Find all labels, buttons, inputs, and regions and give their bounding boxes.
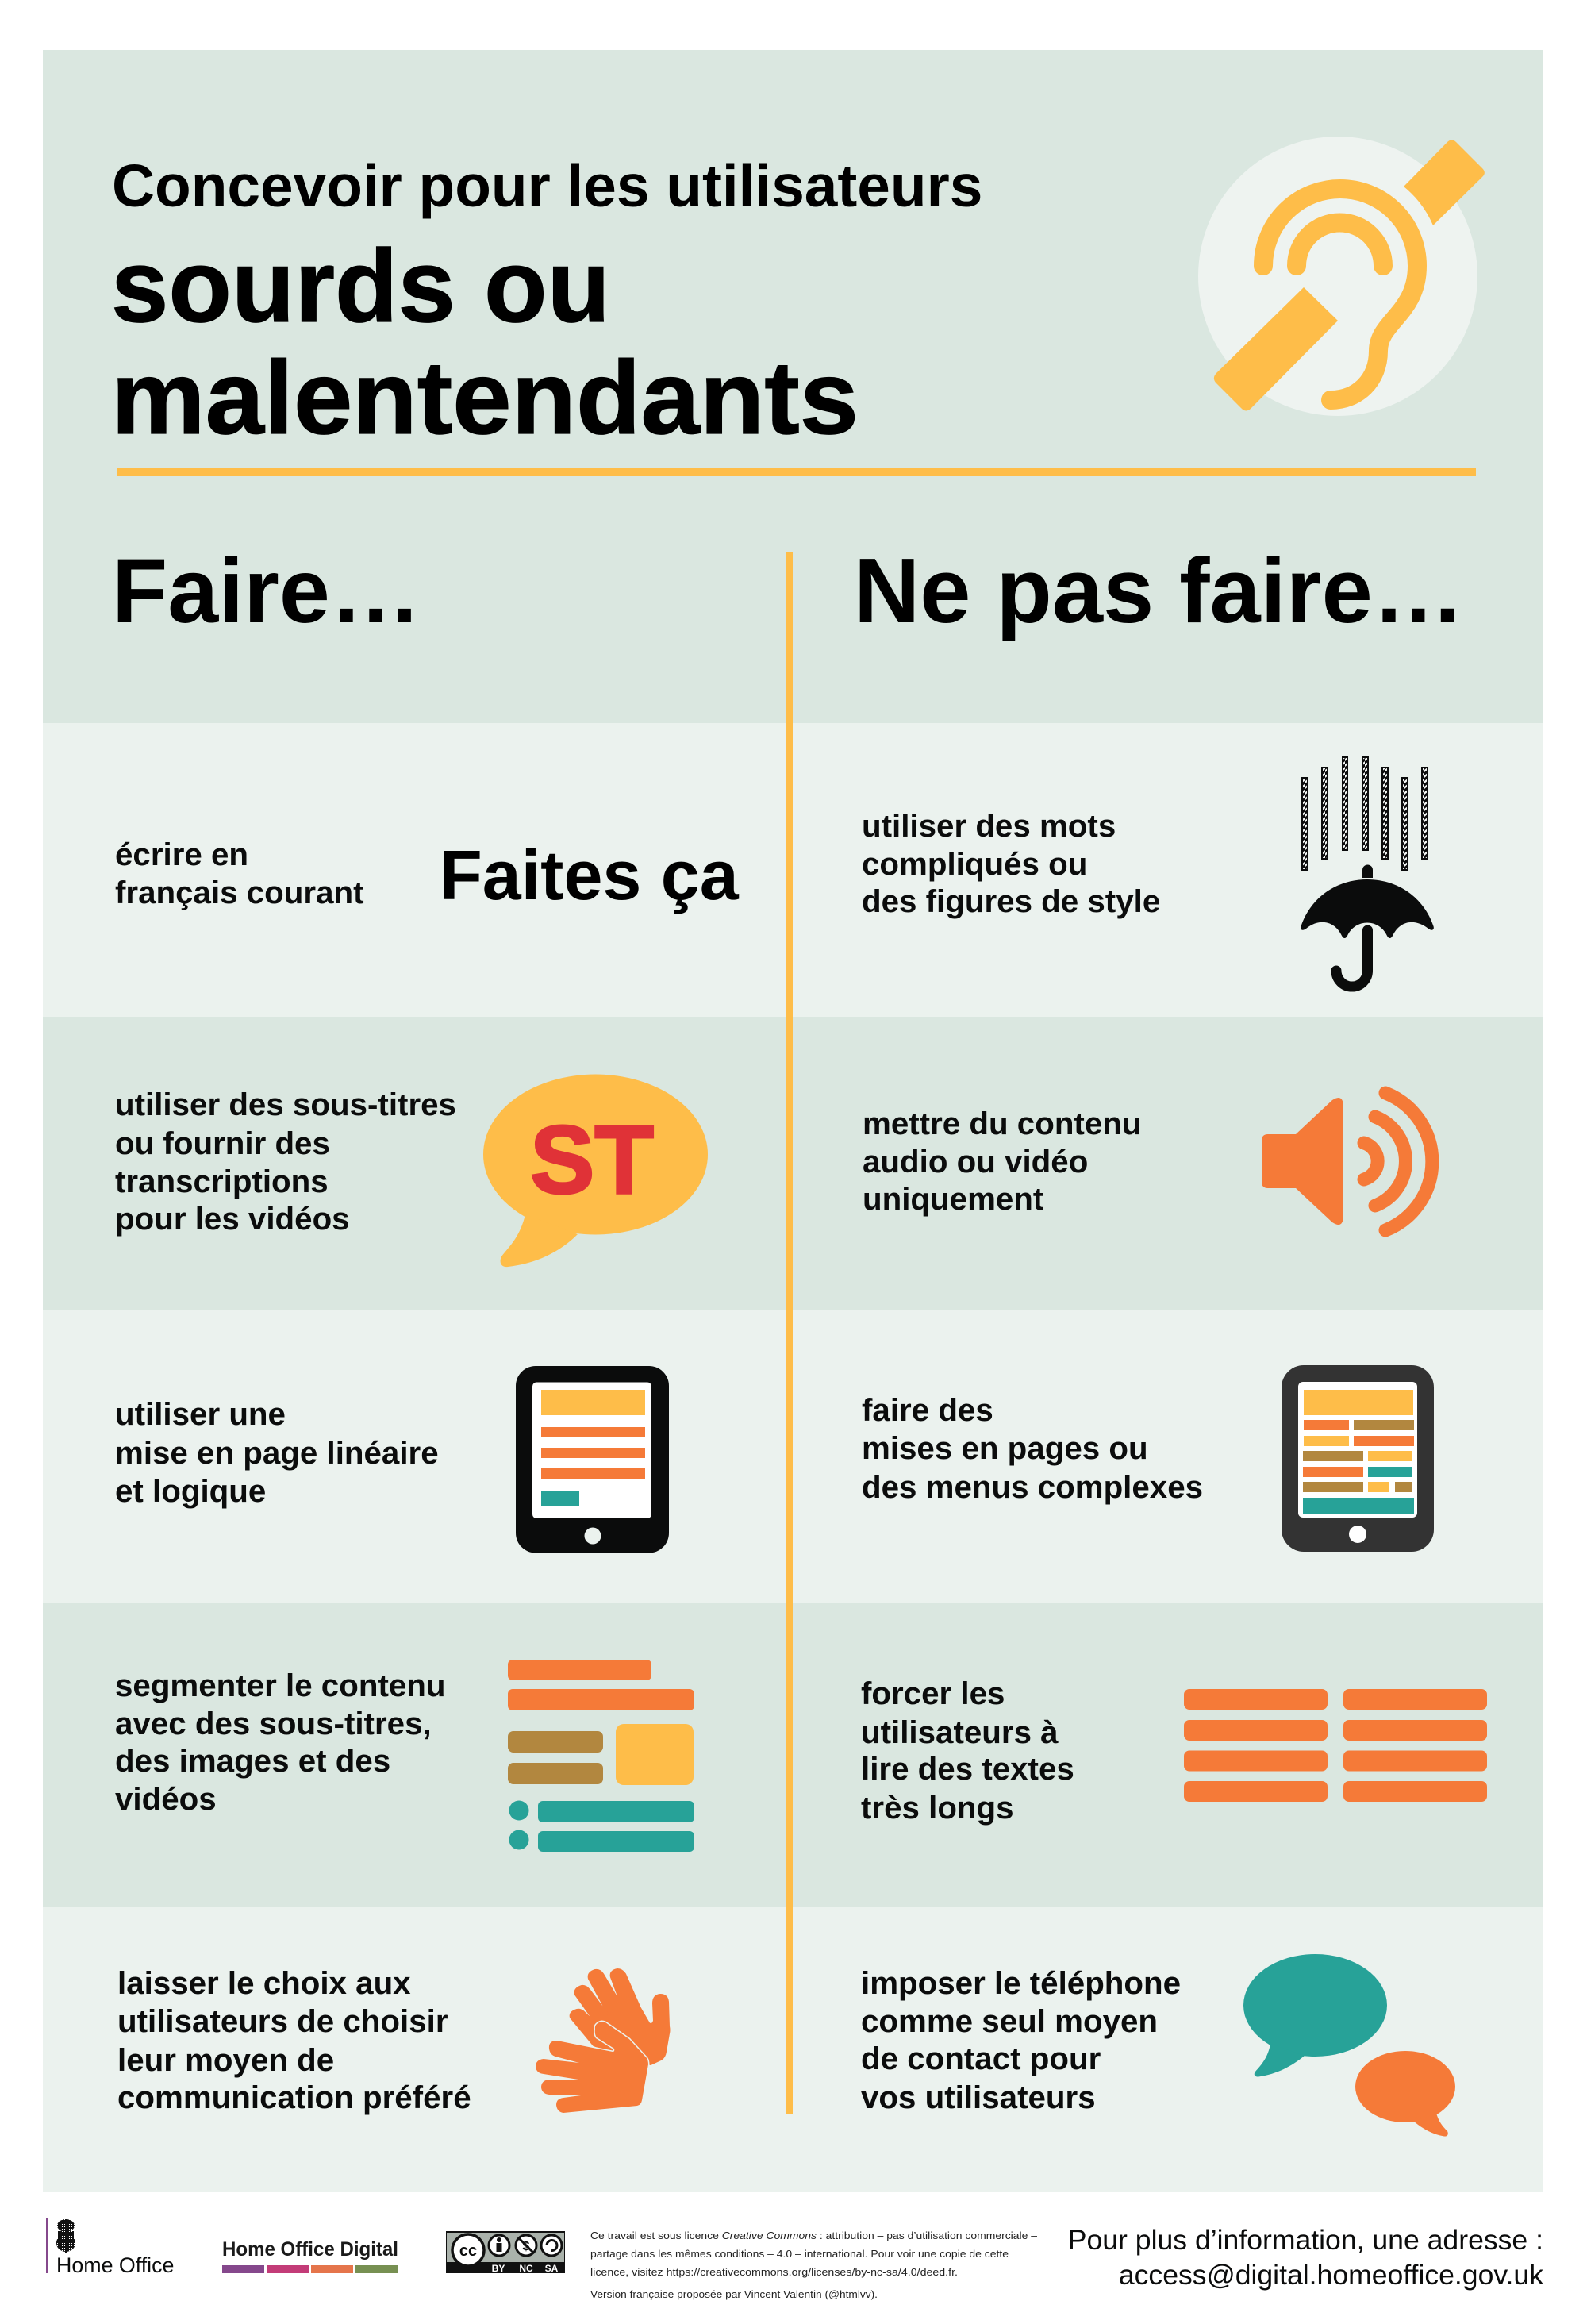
text: segmenter le contenu: vidéos (115, 1781, 217, 1817)
logo: Creative Commons BY-NC-SA: $ (523, 2240, 530, 2253)
icon: hearing loss ear (1198, 137, 1485, 416)
panel: row 4 background (43, 1603, 1543, 1907)
logo: Creative Commons BY-NC-SA: BY (492, 2263, 505, 2274)
icon: rain and umbrella (1301, 757, 1434, 987)
text: imposer le téléphone: de contact pour (861, 2041, 1101, 2076)
text: mises en pages complexes (862, 1392, 1203, 1505)
text: mots compliqués: utiliser des mots (862, 808, 1116, 844)
logo: Home Office: Home Office (56, 2253, 174, 2277)
icon: loudspeaker (1262, 1093, 1432, 1230)
text: sous-titres: transcriptions (115, 1164, 329, 1199)
text: écrire en français courant: écrire en (115, 837, 248, 872)
panel: header background (43, 50, 1543, 723)
text: audio vidéo uniquement: audio ou vidéo (863, 1144, 1088, 1179)
text: mises en pages complexes: mises en pages ou (862, 1430, 1148, 1466)
text: segmenter le contenu: avec des sous-titres, (115, 1706, 432, 1741)
text: segmenter le contenu (115, 1668, 446, 1817)
central divider (786, 552, 793, 2114)
licence text: partage dans les mêmes conditions – 4.0 – international. Pour voir une copie de cette (590, 2248, 1009, 2260)
text: textes très longs: utilisateurs à (861, 1714, 1059, 1750)
text: mise en page linéaire: et logique (115, 1473, 266, 1509)
icon: segmented content layout (508, 1660, 694, 1852)
text: sous-titres: pour les vidéos (115, 1201, 350, 1237)
text: mots compliqués: des figures de style (862, 883, 1160, 919)
text: mises en pages complexes: faire des (862, 1392, 993, 1428)
logo: Home Office (46, 2218, 174, 2277)
text: sous-titres (115, 1087, 456, 1237)
text: mise en page linéaire: mise en page linéaire (115, 1435, 439, 1471)
text: moyen de communication: laisser le choix aux (117, 1965, 411, 2001)
heading: Faire: Faire… (112, 541, 421, 642)
icon: ST speech bubble: ST (530, 1106, 654, 1214)
icon: long text columns (1184, 1689, 1487, 1802)
text: imposer le téléphone: imposer le téléphone (861, 1965, 1181, 2001)
licence text: Version française proposée par Vincent Valentin (@htmlvv). (590, 2288, 878, 2300)
title: malentendants (111, 339, 859, 456)
icon: two speech bubbles (1243, 1954, 1455, 2137)
icon: tablet simple layout (516, 1366, 669, 1553)
text: mises en pages complexes: des menus complexes (862, 1469, 1203, 1505)
logo: Home Office Digital: Home Office Digital (222, 2238, 398, 2261)
heading: Ne pas faire: Ne pas faire… (854, 539, 1464, 642)
text: mise en page linéaire (115, 1396, 439, 1509)
title: Concevoir pour les utilisateurs (112, 152, 982, 219)
text: mots compliqués: compliqués ou (862, 846, 1087, 882)
text: segmenter le contenu: des images et des (115, 1743, 390, 1779)
title: sourds ou (111, 228, 610, 344)
text: écrire en français courant (115, 837, 364, 910)
logo: Creative Commons BY-NC-SA: SA (545, 2263, 559, 2274)
text: textes très longs (861, 1676, 1074, 1826)
text: textes très longs: très longs (861, 1790, 1014, 1826)
text: écrire en français courant: français courant (115, 875, 364, 910)
text: imposer le téléphone: comme seul moyen (861, 2003, 1158, 2039)
text: mots compliqués (862, 808, 1160, 919)
text: audio vidéo uniquement (863, 1106, 1141, 1217)
header rule (117, 468, 1476, 476)
licence text: Ce travail est sous licence Creative Commons : attribution – pas d’utilisation commerciale – (590, 2230, 1038, 2241)
icon: signing hands (536, 1969, 670, 2113)
title (111, 152, 982, 456)
logo: Creative Commons BY-NC-SA (446, 2231, 565, 2274)
logo: Creative Commons BY-NC-SA: cc (459, 2242, 477, 2260)
text: sous-titres: ou fournir des (115, 1125, 330, 1161)
text: imposer le téléphone (861, 1965, 1181, 2115)
text: textes très longs: forcer les (861, 1676, 1005, 1711)
panel: row 3 background (43, 1310, 1543, 1603)
licence text (590, 2230, 1038, 2300)
contact text: access@digital.homeoffice.gov.uk (1119, 2259, 1543, 2291)
text: audio vidéo uniquement: uniquement (863, 1181, 1043, 1217)
text: textes très longs: lire des textes (861, 1751, 1074, 1787)
icon: ST speech bubble (483, 1075, 708, 1267)
logo: Creative Commons BY-NC-SA: NC (519, 2263, 533, 2274)
licence text: licence, visitez https://creativecommons.org/licenses/by-nc-sa/4.0/deed.fr. (590, 2266, 958, 2278)
text: segmenter le contenu: segmenter le contenu (115, 1668, 446, 1703)
text: imposer le téléphone: vos utilisateurs (861, 2080, 1096, 2115)
example: Faites ça: Faites ça (440, 836, 740, 914)
contact text (1068, 2224, 1543, 2291)
text: moyen de communication (117, 1965, 471, 2115)
text: moyen de communication: utilisateurs de choisir (117, 2003, 448, 2039)
text: moyen de communication: communication préféré (117, 2080, 471, 2115)
text: sous-titres: utiliser des sous-titres (115, 1087, 456, 1122)
text: mise en page linéaire: utiliser une (115, 1396, 286, 1432)
contact text: Pour plus d’information, une adresse : (1068, 2224, 1543, 2256)
icon: tablet complex layout (1282, 1365, 1434, 1552)
logo: Home Office Digital (222, 2238, 398, 2273)
text: moyen de communication: leur moyen de (117, 2042, 334, 2078)
text: audio vidéo uniquement: mettre du contenu (863, 1106, 1141, 1141)
panel: row 1 background (43, 723, 1543, 1017)
panel: row 5 background (43, 1907, 1543, 2192)
panel: row 2 background (43, 1017, 1543, 1310)
